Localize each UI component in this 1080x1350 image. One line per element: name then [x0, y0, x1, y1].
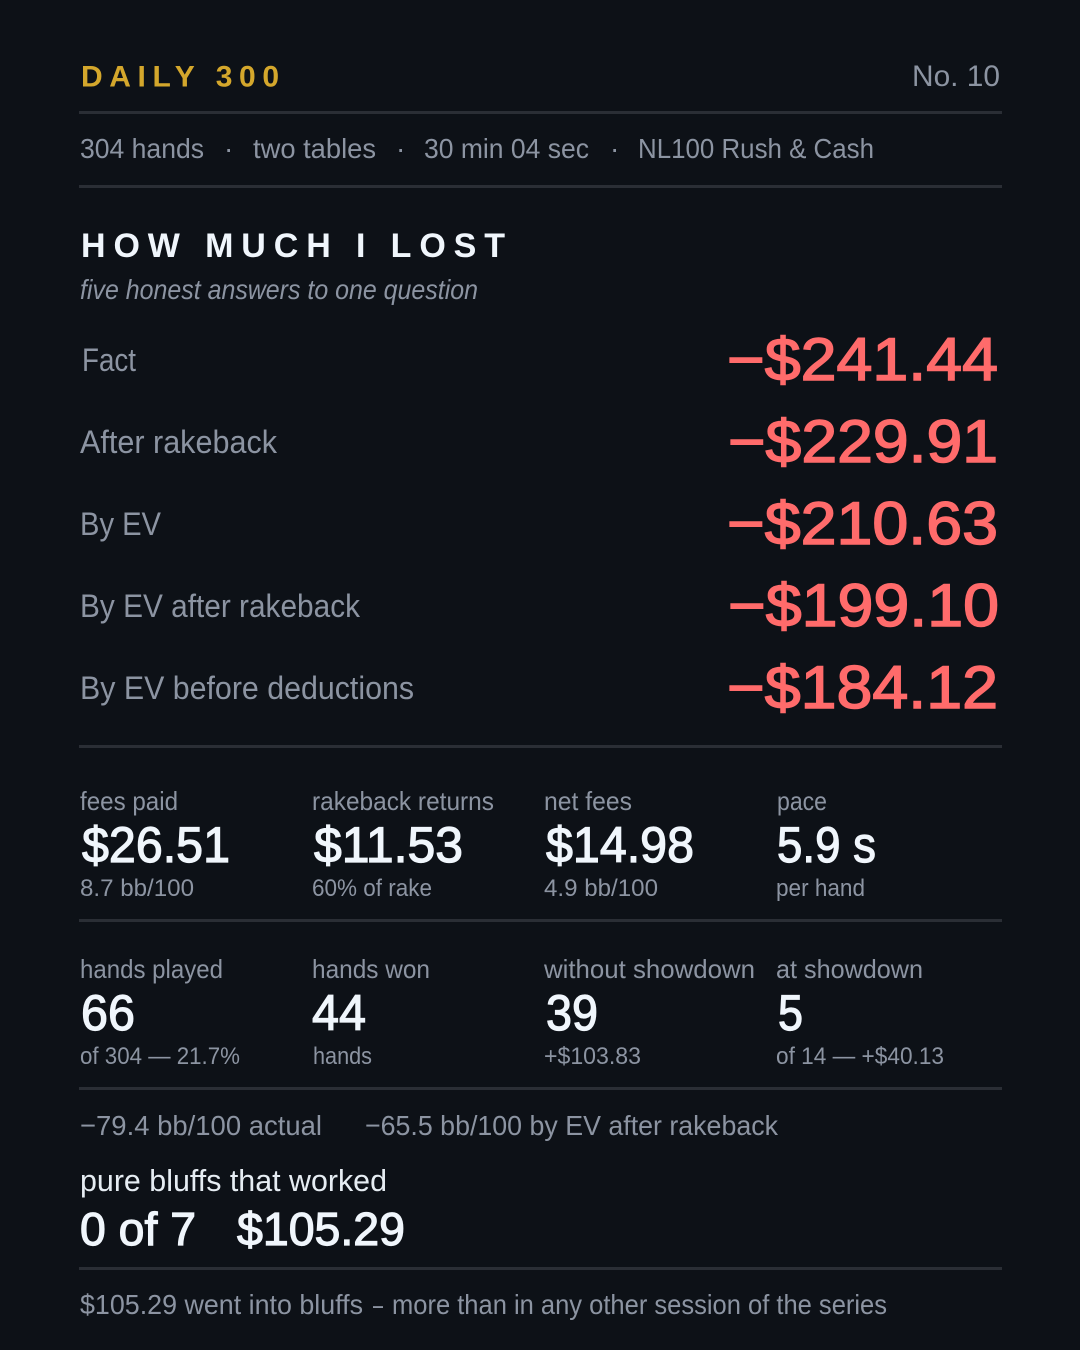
session meta line: ·	[224, 133, 233, 164]
stat: without showdown: without showdown	[543, 954, 755, 984]
stat: net fees: net fees	[544, 786, 632, 816]
row: after rakeback: −$229.91	[728, 408, 998, 475]
stat: net fees: $14.98	[546, 817, 694, 873]
row: after rakeback: After rakeback	[80, 424, 278, 460]
row: by EV before deductions: By EV before deductions	[80, 670, 414, 706]
stat: hands played	[80, 954, 240, 1070]
stat: hands played: of 304 — 21.7%	[80, 1043, 240, 1070]
title: Daily 300: DAILY 300	[81, 60, 279, 94]
row: by EV after rakeback	[80, 572, 999, 639]
loss table	[80, 326, 999, 721]
row: by EV after rakeback: By EV after rakeback	[80, 588, 361, 624]
stat: rakeback returns	[312, 786, 494, 902]
stats row: fees	[80, 786, 876, 902]
stat: pace: pace	[777, 786, 827, 816]
stat: rakeback returns: rakeback returns	[312, 786, 494, 816]
row: by EV	[80, 490, 998, 557]
header	[81, 60, 1000, 94]
stat: without showdown: 39	[546, 985, 598, 1041]
stat: pace	[776, 786, 876, 902]
stat: at showdown: of 14 — +$40.13	[776, 1043, 944, 1070]
stat: at showdown: 5	[778, 985, 803, 1041]
bluffs count: 0 of 7	[80, 1203, 196, 1255]
stat: hands won	[312, 954, 430, 1070]
stat: pace: per hand	[776, 875, 865, 902]
bluffs block	[80, 1163, 405, 1255]
stat: without showdown: +$103.83	[544, 1043, 641, 1070]
row: fact	[82, 326, 998, 393]
win rate line: −79.4 bb/100 actual	[80, 1110, 322, 1141]
session meta line: 304 hands	[80, 133, 204, 164]
section heading	[80, 227, 505, 305]
bluffs label: pure bluffs that worked	[80, 1163, 387, 1198]
win rate line: −65.5 bb/100 by EV after rakeback	[365, 1110, 779, 1141]
subheading: five honest answers to one question	[80, 274, 478, 305]
footer note: $105.29 went into bluffs	[80, 1289, 363, 1320]
footer note: more than in any other session of the series	[392, 1289, 887, 1320]
stat: fees paid: $26.51	[82, 817, 230, 873]
stat: pace: 5.9 s	[777, 817, 876, 873]
stat: net fees: 4.9 bb/100	[544, 875, 658, 902]
footer note	[80, 1289, 887, 1320]
stat: rakeback returns: 60% of rake	[312, 875, 432, 902]
stat: hands won: 44	[312, 985, 366, 1041]
stat: hands played: 66	[81, 985, 135, 1041]
row: by EV before deductions: −$184.12	[727, 654, 998, 721]
session meta line: NL100 Rush & Cash	[638, 133, 874, 164]
issue number: No. 10	[912, 60, 1000, 93]
session meta line: 30 min 04 sec	[424, 133, 589, 164]
row: by EV: −$210.63	[727, 490, 998, 557]
stat: rakeback returns: $11.53	[314, 817, 463, 873]
stats row: hands	[80, 954, 944, 1070]
stat: without showdown	[543, 954, 755, 1070]
bluffs amount: $105.29	[237, 1203, 405, 1255]
session meta line: ·	[396, 133, 405, 164]
stat: net fees	[544, 786, 694, 902]
session meta line: ·	[610, 133, 619, 164]
session meta line	[80, 133, 874, 164]
stat: hands played: hands played	[80, 954, 223, 984]
row: after rakeback	[80, 408, 998, 475]
stat: fees paid	[80, 786, 230, 902]
row: by EV after rakeback: −$199.10	[728, 572, 999, 639]
session meta line: two tables	[253, 133, 376, 164]
stat: at showdown	[776, 954, 944, 1070]
heading: How much I lost: HOW MUCH I LOST	[81, 227, 505, 265]
row: fact: Fact	[82, 342, 136, 378]
stat: fees paid: fees paid	[80, 786, 178, 816]
footer note: –	[373, 1289, 383, 1320]
row: fact: −$241.44	[727, 326, 998, 393]
stat: at showdown: at showdown	[776, 954, 923, 984]
win rate line	[80, 1110, 779, 1141]
stat: fees paid: 8.7 bb/100	[80, 875, 194, 902]
row: by EV before deductions	[80, 654, 998, 721]
stat: hands won: hands won	[312, 954, 430, 984]
row: by EV: By EV	[80, 506, 162, 542]
stat: hands won: hands	[313, 1043, 372, 1070]
